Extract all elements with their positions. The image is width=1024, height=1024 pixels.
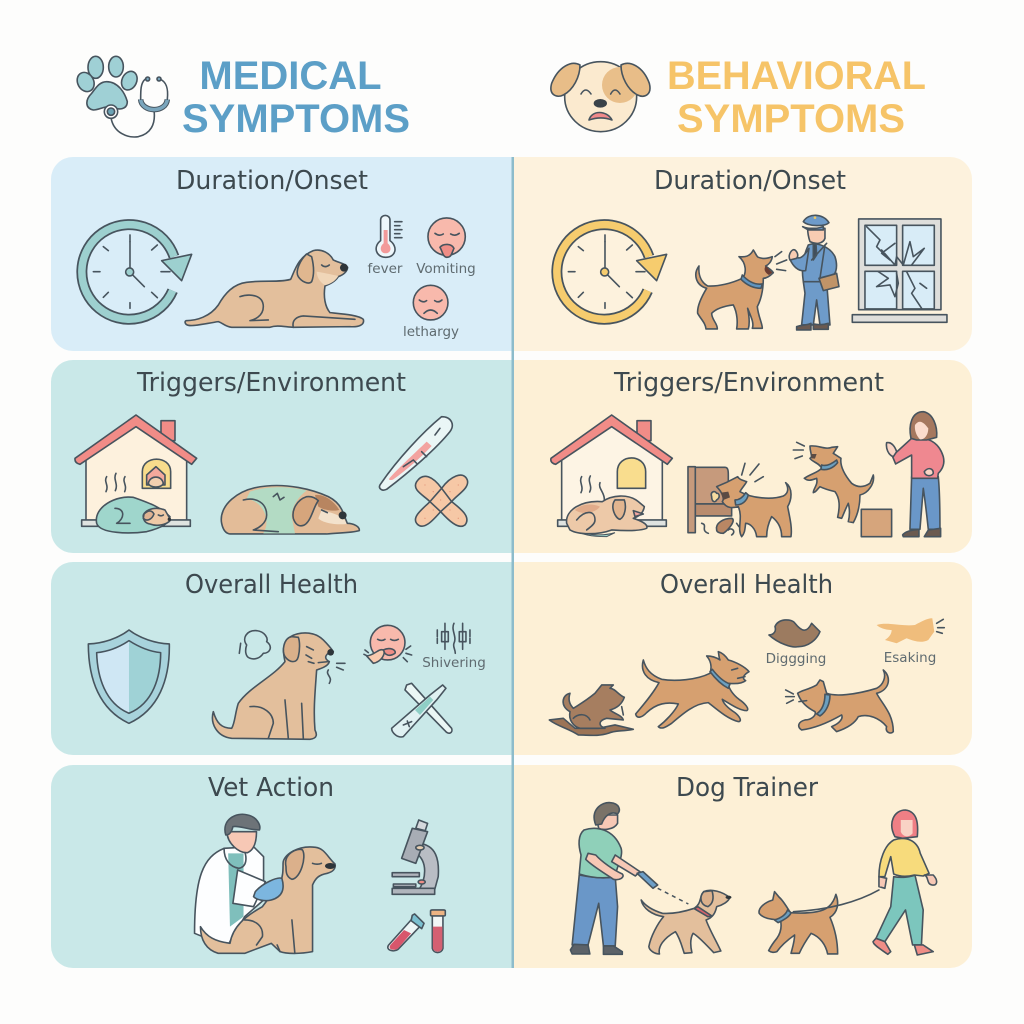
icon: behavioral clock <box>557 225 667 319</box>
illustration: lying dog <box>185 250 364 327</box>
illustration: coughing sitting dog <box>212 631 345 739</box>
heading: behavioral overall health: Overall Health <box>660 570 833 600</box>
icon: lethargy face <box>413 285 448 320</box>
icon: syringe and thermometer <box>392 683 452 737</box>
panel: behavioral triggers/environment <box>514 360 972 553</box>
illustration: barking running dog <box>786 670 893 733</box>
title: medical symptoms: MEDICAL <box>199 54 382 98</box>
panel: vet action <box>51 765 512 968</box>
heading: medical duration/onset: Duration/Onset <box>176 166 368 196</box>
title: behavioral symptoms: BEHAVIORAL <box>667 54 926 98</box>
icon: microscope <box>392 820 438 894</box>
icon: vomiting face <box>428 218 465 257</box>
illustration: running dog <box>636 652 749 728</box>
title: behavioral symptoms <box>667 54 926 141</box>
illustration: mail carrier <box>789 215 839 330</box>
heading: behavioral triggers/environment: Triggers/Environment <box>613 368 884 398</box>
label: shivering: Shivering <box>422 655 486 671</box>
icon: paw and stethoscope <box>74 56 168 137</box>
illustration: brown dog on leash <box>759 890 879 954</box>
illustration: barking dog <box>696 250 787 329</box>
heading: medical overall health: Overall Health <box>185 570 358 600</box>
illustration: veterinarian and dog <box>195 814 336 953</box>
title: behavioral symptoms: SYMPTOMS <box>677 97 905 141</box>
heading: behavioral duration/onset: Duration/Onset <box>654 166 846 196</box>
illustration: dog chewing chair <box>688 463 791 537</box>
panel: behavioral duration/onset <box>514 157 972 351</box>
illustration: sick dog with sweater <box>221 486 359 534</box>
label: lethargy: lethargy <box>403 324 459 340</box>
illustration: golden dog on trainer side <box>641 890 731 954</box>
icon: digging dirt mound <box>769 620 820 647</box>
panel: medical overall health <box>51 562 512 755</box>
icon: shield <box>88 630 169 723</box>
icon: escaping dog <box>877 618 944 643</box>
title: medical symptoms <box>182 54 410 141</box>
icon: thermometer fever <box>376 215 402 257</box>
icon: thermometer and bandage <box>380 417 468 526</box>
icon: coughing face <box>364 625 412 663</box>
illustration: woman pointing <box>886 412 944 537</box>
label: fever: fever <box>368 261 403 277</box>
icon: shivering symbol <box>437 623 470 653</box>
panel: medical duration/onset <box>51 157 512 351</box>
panel: medical triggers/environment <box>51 360 512 553</box>
heading: medical triggers/environment: Triggers/Environment <box>136 368 406 398</box>
panel: behavioral overall health <box>514 562 972 755</box>
label: vomiting: Vomiting <box>416 261 476 277</box>
icon: dog face <box>551 62 650 132</box>
illustration: trainer with clicker <box>570 803 688 954</box>
illustration: behavioral house with resting dog <box>551 415 672 537</box>
illustration: muddy dog <box>549 685 633 735</box>
panel: dog trainer <box>514 765 972 968</box>
heading: vet action: Vet Action <box>208 773 334 803</box>
label: digging: Diggging <box>766 651 826 667</box>
icon: medical clock <box>82 225 192 319</box>
illustration: broken window <box>852 219 947 322</box>
heading: dog trainer: Dog Trainer <box>676 773 818 803</box>
illustration: woman walking <box>873 810 937 955</box>
illustration: jumping dog and box <box>793 442 892 537</box>
illustration: medical house with sick dog <box>75 415 197 533</box>
label: escaking: Esaking <box>884 650 936 666</box>
title: medical symptoms: SYMPTOMS <box>182 97 410 141</box>
icon: blood test tubes <box>388 910 445 953</box>
